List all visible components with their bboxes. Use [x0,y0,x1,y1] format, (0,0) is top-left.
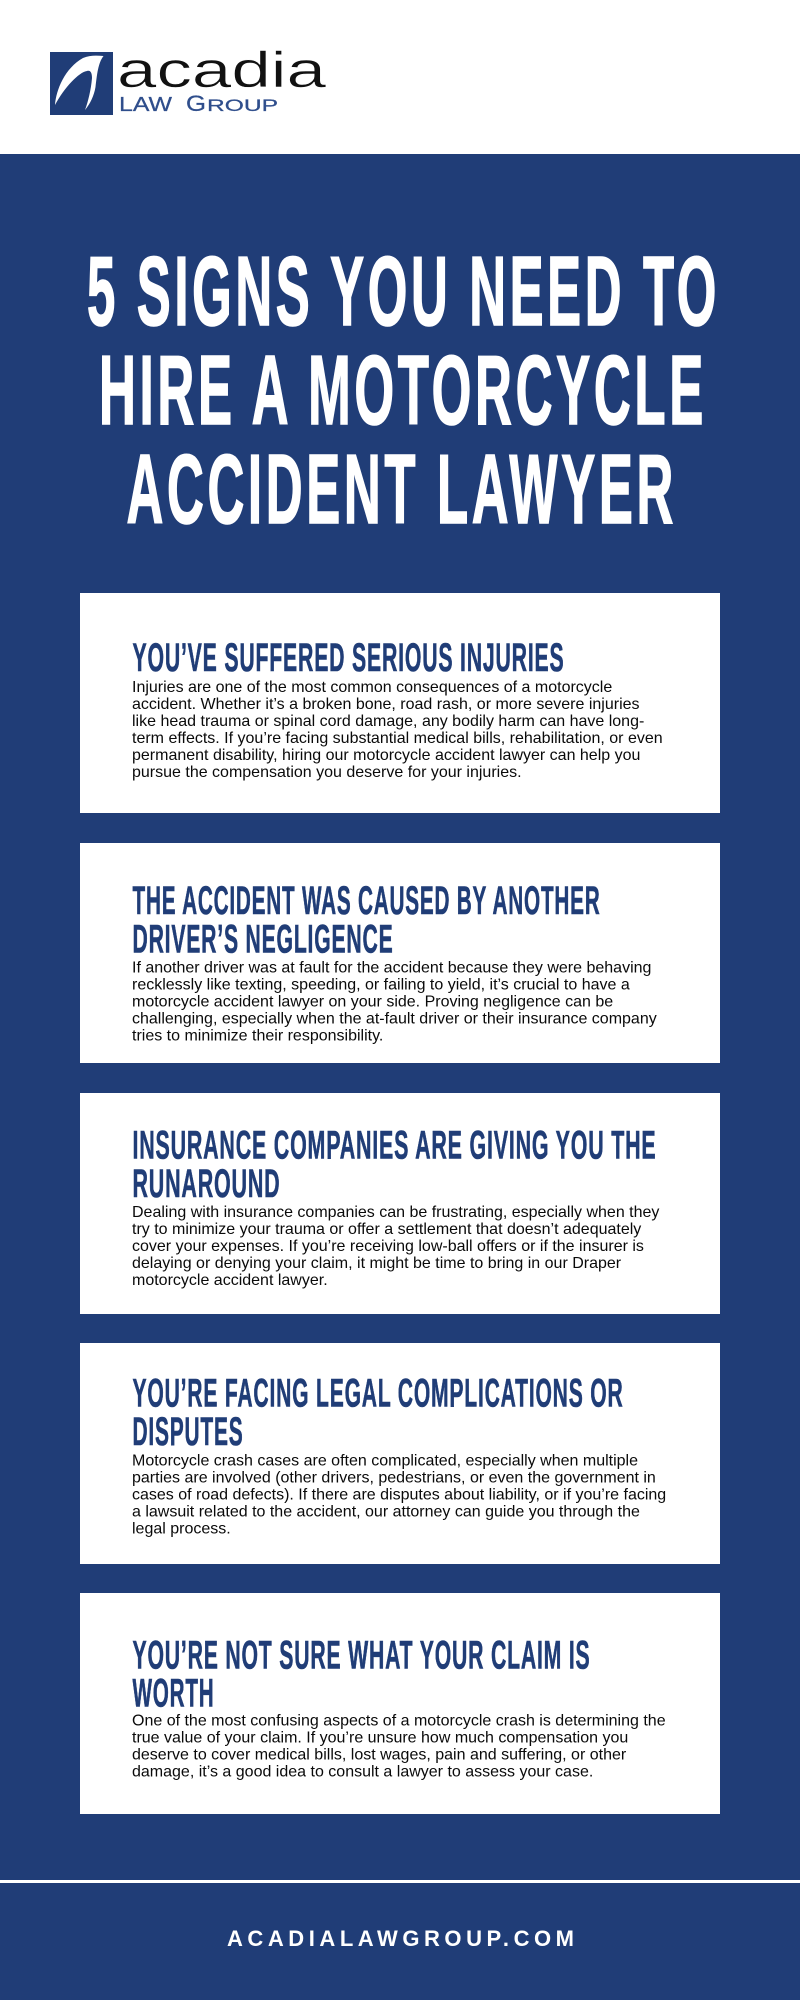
logo subtitle: LAW [119,94,172,116]
text: legal complications: parties are involved (other drivers, pedestrians, or even the government in [132,1470,656,1486]
panel: insurance runaround [80,1093,720,1314]
heading: claim worth: WORTH [132,1672,214,1716]
text: another driver's negligence: recklessly like texting, speeding, or failing to yield, it’s crucial to have a [132,976,630,994]
text: another driver's negligence: If another driver was at fault for the accident because they were behaving [132,960,651,976]
text: insurance runaround: cover your expenses. If you’re receiving low-ball offers or if the insurer is [132,1238,644,1255]
text: serious injuries: pursue the compensation you deserve for your injuries. [132,764,522,781]
text: legal complications: Motorcycle crash cases are often complicated, especially when multiple [132,1452,638,1470]
text: insurance runaround: try to minimize your trauma or offer a settlement that doesn’t adequately [132,1221,641,1238]
heading: legal complications: DISPUTES [132,1410,244,1454]
text: another driver's negligence: challenging, especially when the at-fault driver or their insurance company [132,1010,657,1028]
text: another driver's negligence: tries to minimize their responsibility. [132,1028,383,1044]
text: legal complications: a lawsuit related to the accident, our attorney can guide you through the [132,1504,640,1520]
text: serious injuries: term effects. If you’re facing substantial medical bills, rehabilitation, or even [132,730,663,747]
heading: claim worth [132,1634,590,1716]
heading: insurance runaround: RUNAROUND [132,1162,280,1206]
text: insurance runaround: delaying or denying your claim, it might be time to bring in our Draper [132,1255,622,1272]
text: serious injuries: accident. Whether it’s a broken bone, road rash, or more severe injuries [132,696,640,713]
heading: another driver's negligence: DRIVER’S NEGLIGENCE [132,918,394,962]
text: legal complications: legal process. [132,1520,231,1538]
panel: claim worth [80,1593,720,1814]
text: insurance runaround: motorcycle accident lawyer. [132,1272,328,1289]
text: claim worth: true value of your claim. If you’re unsure how much compensation you [132,1730,628,1746]
panel: legal complications [80,1343,720,1564]
panel: another driver's negligence [80,843,720,1063]
heading: another driver's negligence [132,879,600,962]
text: claim worth: deserve to cover medical bills, lost wages, pain and suffering, or other [132,1746,627,1764]
logo subtitle: ROUP [207,96,278,115]
icon: logo swoosh [55,56,104,110]
footer website: ACADIALAWGROUP.COM [227,1926,574,1951]
logo [50,42,326,116]
logo subtitle: G [186,91,206,116]
title [87,236,720,544]
text: serious injuries: like head trauma or spinal cord damage, any bodily harm can have long- [132,713,644,730]
heading: legal complications [132,1372,624,1454]
text: serious injuries: Injuries are one of the most common consequences of a motorcycle [132,679,612,696]
text: legal complications: cases of road defects). If there are disputes about liability, or if you’re facing [132,1486,666,1504]
text: claim worth: damage, it’s a good idea to consult a lawyer to assess your case. [132,1764,593,1780]
heading: insurance runaround [132,1124,656,1206]
logo wordmark: acadia [117,42,326,98]
text: claim worth: One of the most confusing aspects of a motorcycle crash is determining the [132,1712,666,1730]
text: insurance runaround: Dealing with insurance companies can be frustrating, especially when they [132,1204,659,1221]
icon: logo square [50,52,113,115]
logo subtitle [119,91,278,116]
panel: serious injuries [80,593,720,813]
header band [0,0,800,154]
text: serious injuries: permanent disability, hiring our motorcycle accident lawyer can help you [132,747,640,764]
text: another driver's negligence: motorcycle accident lawyer on your side. Proving negligence can be [132,994,613,1010]
